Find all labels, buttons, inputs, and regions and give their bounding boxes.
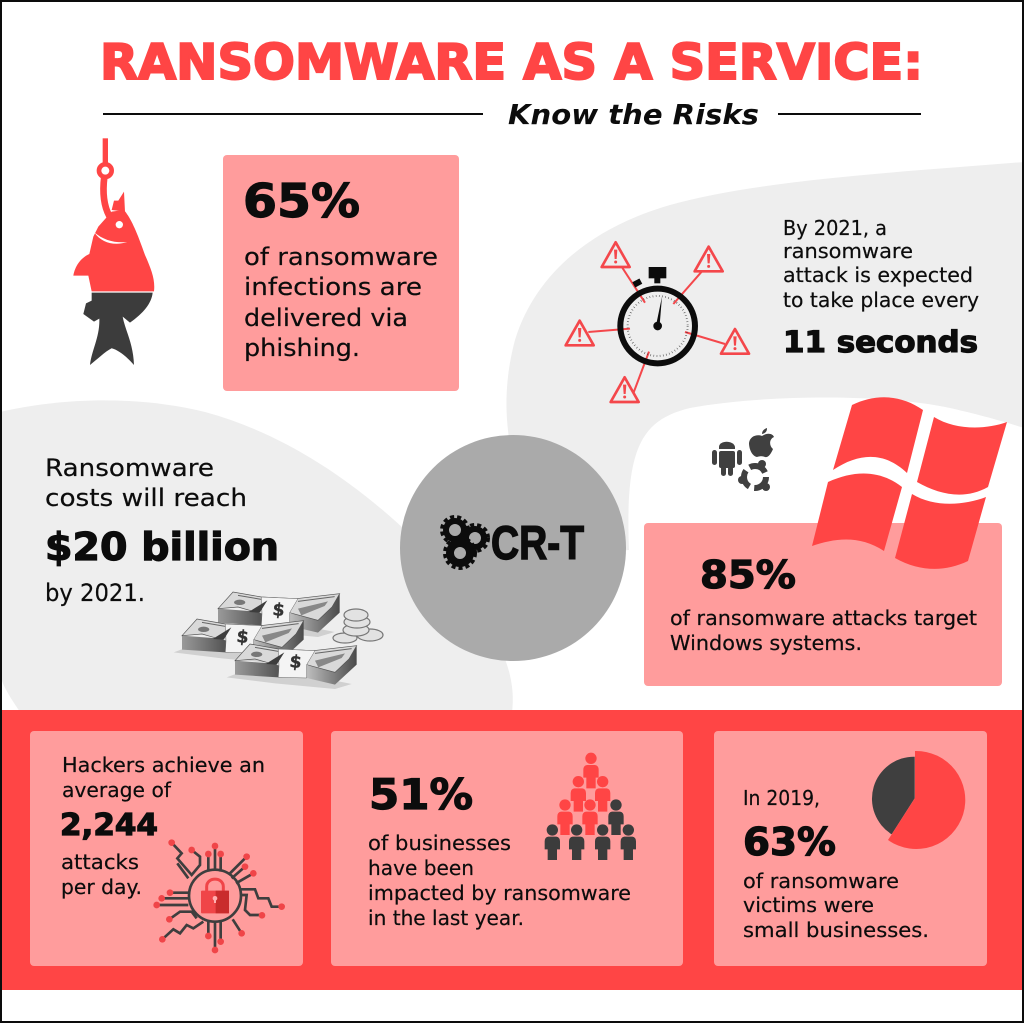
- text: ransomware costs: [45, 454, 279, 607]
- red band: [0, 710, 1024, 990]
- text: ransomware costs: Ransomware: [45, 454, 214, 482]
- panel: attacks per day: 2,244: [60, 808, 158, 843]
- icons: Android, Apple, Ubuntu: [712, 428, 774, 491]
- subtitle with rules: Know the Risks: [508, 98, 759, 131]
- panel: small businesses: small businesses.: [743, 918, 929, 942]
- text: attack frequency: 11 seconds: [783, 325, 978, 359]
- background blob: top right: [506, 162, 1024, 560]
- panel: Windows statistic: 85%: [700, 553, 796, 597]
- icon: Windows flag: [812, 397, 1007, 569]
- panel: phishing statistic: of ransomware: [244, 243, 438, 271]
- panel: attacks per day: [30, 731, 303, 966]
- panel: Windows statistic: of ransomware attacks target: [670, 606, 977, 630]
- panel: attacks per day: average of: [62, 778, 172, 802]
- icon: gears: [442, 517, 488, 568]
- panel: phishing statistic: 65%: [243, 174, 360, 228]
- background blob: left: [0, 400, 513, 712]
- text: ransomware costs: by 2021.: [45, 579, 145, 607]
- text: ransomware costs: $20 billion: [45, 525, 279, 569]
- panel: phishing statistic: delivered via: [244, 304, 408, 332]
- text: attack frequency: By 2021, a: [783, 216, 887, 240]
- panel: phishing statistic: phishing.: [244, 334, 360, 362]
- panel: businesses impacted: in the last year.: [368, 906, 524, 930]
- text: attack frequency: attack is expected: [783, 263, 973, 287]
- title: RANSOMWARE AS A SERVICE:: [100, 34, 923, 91]
- panel: small businesses: [714, 731, 987, 966]
- text: attack frequency: [783, 216, 979, 359]
- icon: people pyramid: [545, 753, 636, 860]
- text: attack frequency: to take place every: [783, 288, 979, 312]
- panel: businesses impacted: impacted by ransomware: [368, 881, 631, 905]
- panel: attacks per day: per day.: [61, 875, 142, 899]
- panel: attacks per day: Hackers achieve an: [62, 753, 265, 777]
- panel: businesses impacted: of businesses: [368, 831, 511, 855]
- panel: attacks per day: attacks: [61, 850, 139, 874]
- panel: small businesses: In 2019,: [743, 786, 820, 810]
- icon: stopwatch with warning triangles: [566, 242, 749, 402]
- panel: businesses impacted: 51%: [369, 770, 473, 819]
- panel: small businesses: of ransomware: [743, 869, 899, 893]
- text: attack frequency: ransomware: [783, 239, 913, 263]
- logo: CR-T circle: CR-T: [491, 516, 584, 569]
- panel: phishing statistic: [223, 155, 459, 391]
- panel: Windows statistic: Windows systems.: [670, 631, 862, 655]
- panel: Windows statistic: [644, 397, 1007, 686]
- icon: money stacks and coins: [174, 592, 383, 689]
- panel: businesses impacted: have been: [368, 856, 474, 880]
- logo: CR-T circle: [400, 435, 626, 661]
- icon: padlock circuit: [153, 839, 285, 953]
- panel: small businesses: victims were: [743, 893, 874, 917]
- icon: hooked fish: [73, 138, 154, 365]
- panel: businesses impacted: [331, 731, 683, 966]
- panel: phishing statistic: infections are: [244, 273, 422, 301]
- panel: small businesses: 63%: [743, 820, 836, 864]
- text: ransomware costs: costs will reach: [45, 484, 247, 512]
- pie chart: 63%: [872, 751, 965, 849]
